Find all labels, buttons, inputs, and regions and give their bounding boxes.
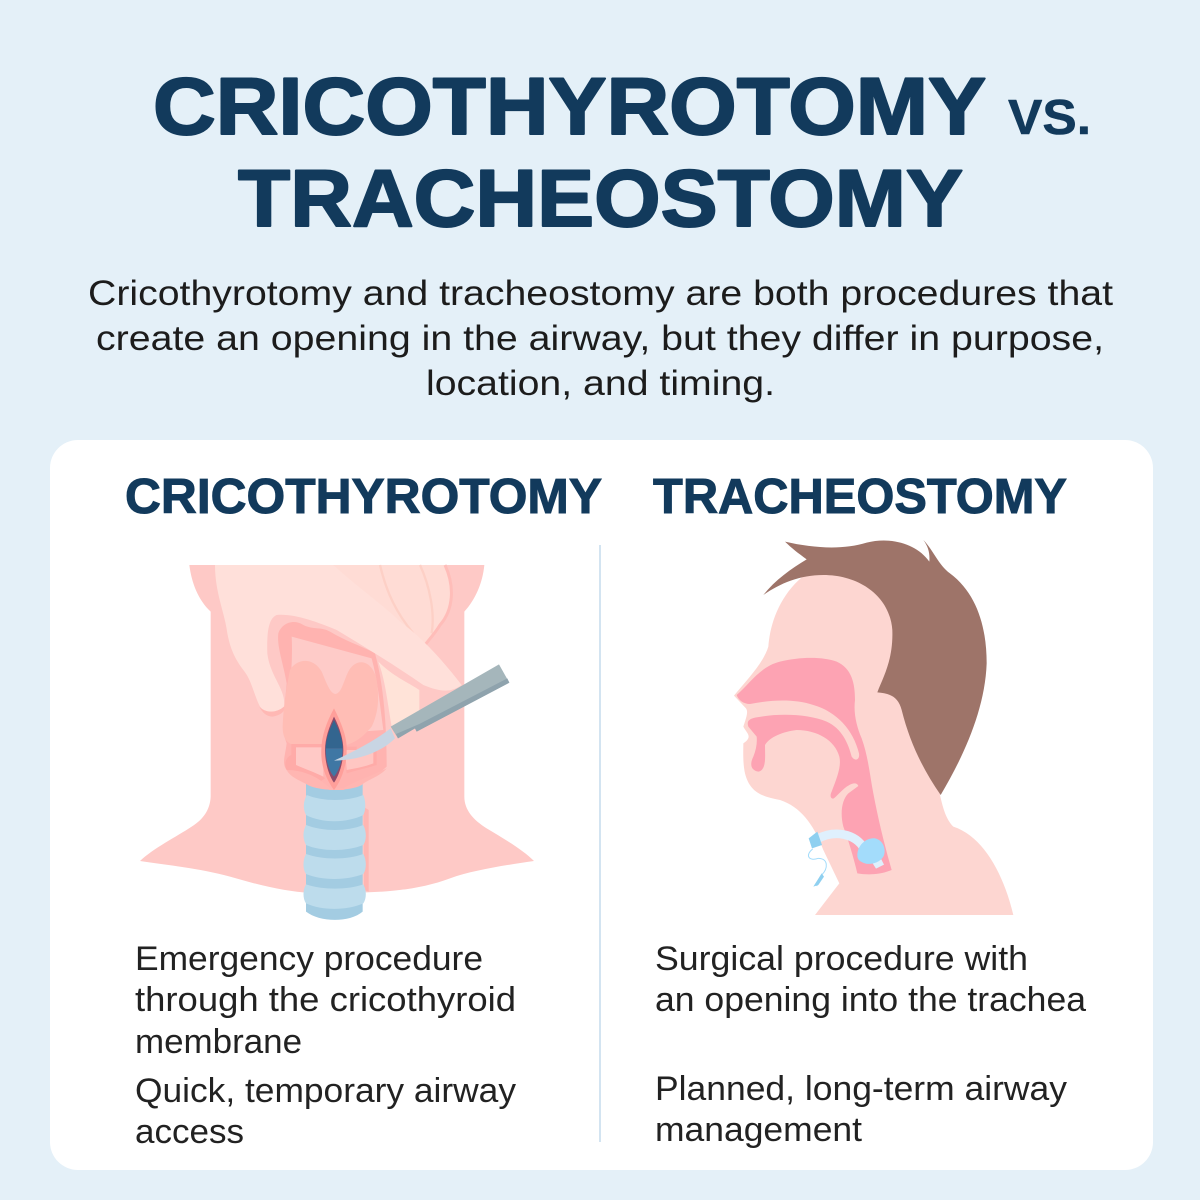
- text: tracheostomy description: [655, 940, 1086, 1149]
- text: cricothyrotomy description: through the cricothyroid: [135, 981, 516, 1019]
- heading: cricothyrotomy: CRICOTHYROTOMY: [125, 470, 602, 524]
- panel: comparison card: [50, 440, 1153, 1170]
- intro text: create an opening in the airway, but they differ in purpose,: [96, 319, 1104, 358]
- scalpel: [334, 664, 509, 761]
- text: tracheostomy description: an opening into the trachea: [655, 981, 1086, 1019]
- fingers behind: [333, 565, 451, 645]
- title: TRACHEOSTOMY: [238, 154, 963, 244]
- intro text: location, and timing.: [426, 364, 775, 403]
- text: cricothyrotomy description: membrane: [135, 1023, 302, 1061]
- hand: thumb and finger: [215, 565, 462, 712]
- thumb shadow: [259, 707, 284, 717]
- text: cricothyrotomy description: Quick, temporary airway: [135, 1072, 516, 1110]
- text: tracheostomy description: management: [655, 1111, 863, 1149]
- lower cricoid: [287, 768, 387, 790]
- head and shoulders: [734, 573, 1013, 915]
- blade: [334, 728, 395, 761]
- text: tracheostomy description: Surgical procedure with: [655, 940, 1028, 978]
- title: VS.: [1008, 91, 1091, 145]
- illustration: head profile with tracheostomy tube: [734, 540, 1013, 915]
- column divider: [599, 545, 601, 1142]
- neck and shoulders: [140, 565, 534, 892]
- finger pale segment: [378, 662, 419, 727]
- text: cricothyrotomy description: access: [135, 1113, 244, 1151]
- text: tracheostomy description: Planned, long-term airway: [655, 1070, 1067, 1108]
- incision: [321, 708, 347, 790]
- nasal cavity and airway: [737, 658, 892, 874]
- heading: tracheostomy: TRACHEOSTOMY: [653, 470, 1067, 524]
- handle: [391, 664, 509, 738]
- tube: [808, 832, 885, 887]
- cricothyroid band: [285, 744, 325, 782]
- illustration: neck incision with scalpel: [140, 565, 534, 920]
- title: CRICOTHYROTOMY: [153, 62, 986, 152]
- thyroid cartilage: [283, 661, 378, 745]
- title: [153, 62, 1091, 244]
- hair: [763, 540, 987, 795]
- text: cricothyrotomy description: Emergency procedure: [135, 940, 483, 978]
- intro text: [88, 274, 1113, 403]
- text: cricothyrotomy description: [135, 940, 516, 1151]
- intro text: Cricothyrotomy and tracheostomy are both procedures that: [88, 274, 1113, 313]
- thyroid frame: [278, 622, 387, 790]
- trachea: [303, 783, 369, 920]
